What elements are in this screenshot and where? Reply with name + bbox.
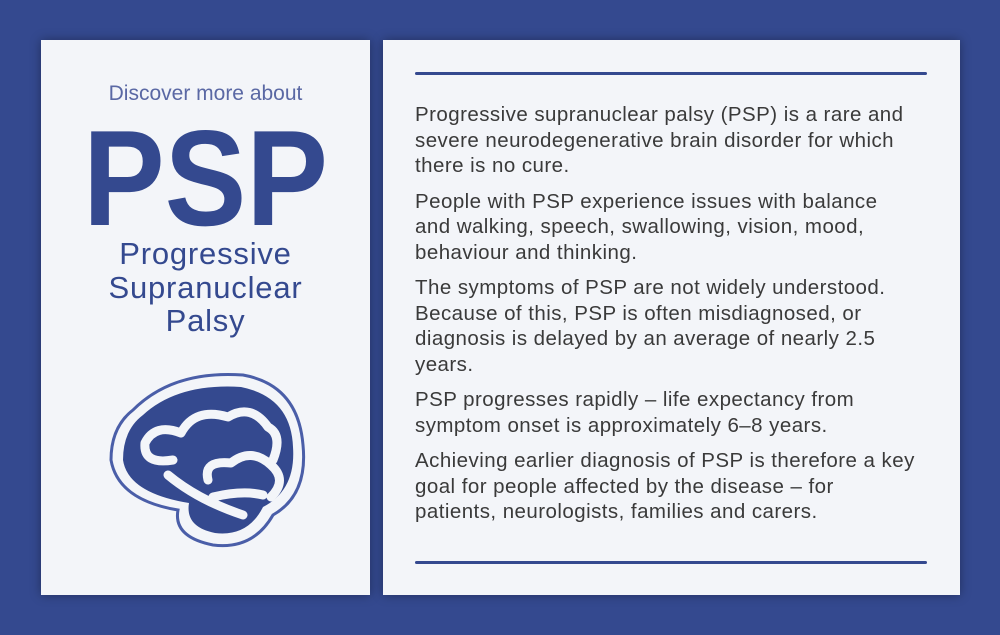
body text: Achieving earlier diagnosis of PSP is therefore a key [415,449,915,472]
body text: goal for people affected by the disease – for [415,474,834,498]
body text: People with PSP experience issues with balance [415,190,877,212]
body text: patients, neurologists, families and carers. [415,500,818,523]
full name: Palsy [166,303,245,338]
body text: PSP progresses rapidly – life expectancy from [415,388,854,411]
full name: Supranuclear [108,270,302,304]
body text: and walking, speech, swallowing, vision, mood, [415,215,864,238]
full name [108,236,302,338]
body text: Because of this, PSP is often misdiagnosed, or [415,302,862,324]
subtitle: Discover more about [109,82,302,105]
panel: description [383,40,960,595]
body text: The symptoms of PSP are not widely understood. [415,276,885,299]
body text [415,103,915,523]
body text: diagnosis is delayed by an average of nearly 2.5 [415,327,875,350]
body text: years. [415,352,474,376]
body text: severe neurodegenerative brain disorder for which [415,128,894,152]
body text: Progressive supranuclear palsy (PSP) is a rare and [415,103,904,126]
icon: brain [110,373,306,548]
heading: PSP: PSP [83,102,328,254]
panel: left title [41,40,370,595]
full name: Progressive [119,236,292,271]
body text: behaviour and thinking. [415,240,637,264]
body text: symptom onset is approximately 6–8 years. [415,414,828,436]
body text: there is no cure. [415,154,570,177]
